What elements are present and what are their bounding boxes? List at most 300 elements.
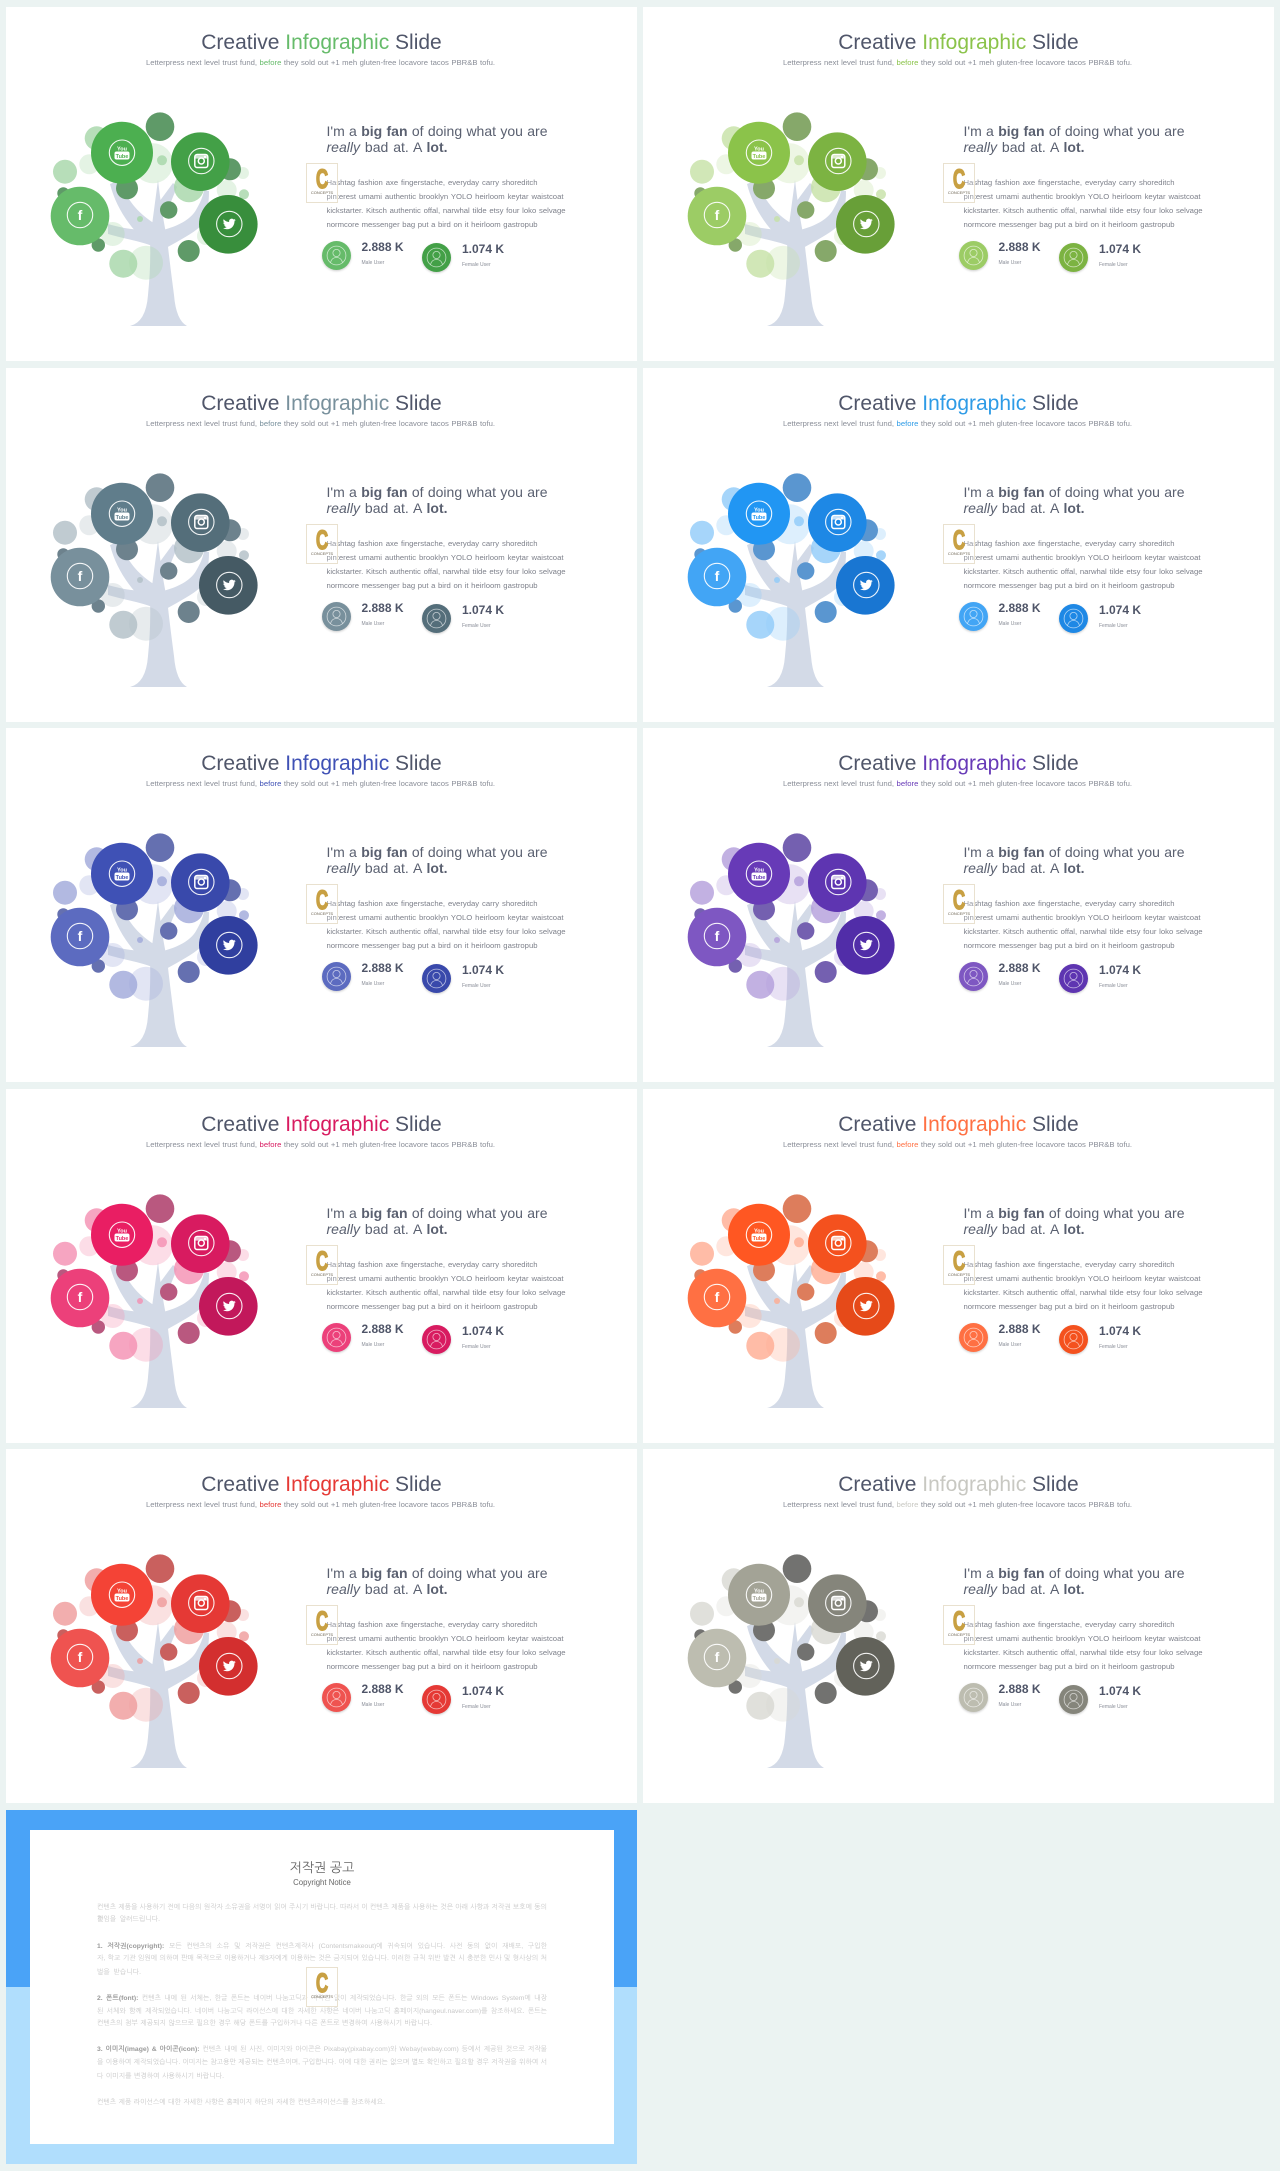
icon: youtube circle <box>728 1564 790 1626</box>
watermark: CONCEPTS <box>311 1272 333 1277</box>
icon: facebook circle <box>688 908 746 966</box>
body text <box>964 899 1202 950</box>
stat: male users <box>958 1682 1078 1714</box>
heading: I'm a big fan of doing what you are <box>326 1564 548 1580</box>
icon: facebook circle <box>51 548 109 606</box>
stat: female users: 1.074 K <box>1099 1684 1141 1698</box>
stat: male users: 2.888 K <box>362 1322 404 1336</box>
body text: normcore messenger bag put a bird on it heirloom gastropub <box>964 941 1174 950</box>
notice text: 컨텐츠의 첨부 제공되지 않으므로 필요한 경우 해당 폰트를 구입하거나 다른 폰트로 변경하여 사용하시기 바랍니다. <box>97 2020 432 2027</box>
stat: male users: Male User <box>998 621 1021 627</box>
stat: female users: 1.074 K <box>462 1324 504 1338</box>
watermark <box>943 1605 975 1645</box>
body text: kickstarter. Kitsch authentic offal, narwhal tilde etsy four loko selvage <box>964 206 1202 215</box>
panel: pink variant <box>6 1089 637 1443</box>
watermark: CONCEPTS <box>311 190 333 195</box>
icon: youtube circle: Tube <box>753 154 765 160</box>
stat: female users: Female User <box>1099 982 1128 988</box>
icon: instagram circle <box>171 1214 230 1273</box>
stat: male users: 2.888 K <box>362 601 404 615</box>
subtitle: Letterpress next level trust fund, before they sold out +1 meh gluten-free locavore tacos PBR&B tofu. <box>783 1140 1132 1148</box>
icon: youtube circle <box>91 122 153 184</box>
heading: really bad at. A lot. <box>326 860 448 876</box>
stat: male users <box>321 601 404 633</box>
watermark <box>943 524 975 564</box>
tree with social circles <box>688 112 895 326</box>
watermark: CONCEPTS <box>948 1272 970 1277</box>
body text <box>964 1258 1202 1314</box>
icon: youtube circle: You <box>754 508 764 514</box>
icon: facebook circle: f <box>78 928 83 944</box>
notice subtitle: Copyright Notice <box>293 1878 351 1887</box>
watermark <box>306 884 338 924</box>
icon: twitter circle <box>836 556 895 615</box>
stat: male users <box>958 601 1041 633</box>
heading: really bad at. A lot. <box>326 139 448 155</box>
heading: I'm a big fan of doing what you are <box>964 122 1184 138</box>
stat: female users: 1.074 K <box>462 962 504 976</box>
icon: youtube circle: Tube <box>116 875 128 881</box>
watermark: C <box>316 1246 328 1276</box>
heading: I'm a big fan of doing what you are <box>964 484 1184 500</box>
notice text: 1. 저작권(copyright): 모든 컨텐츠의 소유 및 저작권은 컨텐츠제작사 (Contentsmakeout)에 귀속되어 있습니다. 사전 동의 없이 재배포, 구입한 <box>97 1943 547 1950</box>
body text <box>326 1618 566 1674</box>
body text: pinterest umami authentic brooklyn YOLO heirloom keytar waistcoat <box>326 913 564 922</box>
icon: youtube circle: You <box>117 508 127 514</box>
stat: male users: 2.888 K <box>362 961 404 975</box>
stat: male users: Male User <box>998 260 1021 266</box>
stat: female users: 1.074 K <box>462 242 504 256</box>
notice card <box>30 1830 614 2144</box>
stat: female users <box>1058 242 1141 274</box>
body text: pinterest umami authentic brooklyn YOLO heirloom keytar waistcoat <box>326 192 564 201</box>
subtitle: Letterpress next level trust fund, before they sold out +1 meh gluten-free locavore tacos PBR&B tofu. <box>783 58 1132 66</box>
heading: I'm a big fan of doing what you are <box>964 1564 1184 1580</box>
stat: male users <box>322 1322 442 1354</box>
body text: normcore messenger bag put a bird on it heirloom gastropub <box>326 220 538 229</box>
heading: really bad at. A lot. <box>964 139 1084 155</box>
icon: youtube circle: Tube <box>753 1236 765 1242</box>
stat: male users <box>321 240 404 272</box>
icon: youtube circle: You <box>117 1228 127 1234</box>
heading <box>964 844 1184 876</box>
body text: kickstarter. Kitsch authentic offal, narwhal tilde etsy four loko selvage <box>964 927 1202 936</box>
subtitle: Letterpress next level trust fund, before they sold out +1 meh gluten-free locavore tacos PBR&B tofu. <box>146 58 495 66</box>
tree with social circles <box>688 833 895 1047</box>
stat: female users: 1.074 K <box>1099 242 1141 256</box>
icon: youtube circle <box>91 1564 153 1626</box>
icon: youtube circle <box>728 1204 790 1266</box>
notice text: 컨텐츠 제품 라이선스에 대한 자세한 사항은 홈페이지 하단의 자세한 컨텐츠라이선스를 참조하세요. <box>97 2099 385 2106</box>
watermark <box>306 1245 338 1285</box>
panel: blue grey variant <box>6 368 637 722</box>
icon: youtube circle: You <box>117 868 127 874</box>
body text: kickstarter. Kitsch authentic offal, narwhal tilde etsy four loko selvage <box>326 1288 566 1297</box>
notice title: 저작권 공고 <box>290 1860 354 1875</box>
icon: youtube circle: Tube <box>116 1596 128 1602</box>
stat: female users <box>1058 602 1141 635</box>
heading: I'm a big fan of doing what you are <box>964 844 1184 860</box>
notice text: 을 이용하여 제작되었습니다. 이미지는 참고용만 제공되는 컨텐츠이며, 구입합니다. 이에 대한 권리는 없으며 별도 확인하고 필요할 경우 저작권을 위하여 서 <box>97 2059 547 2066</box>
stat: female users <box>422 1324 542 1356</box>
body text <box>964 539 1202 590</box>
body text: normcore messenger bag put a bird on it heirloom gastropub <box>326 1662 538 1671</box>
icon: instagram circle <box>171 1574 230 1633</box>
watermark <box>306 1967 338 2007</box>
panel: indigo variant <box>6 728 637 1082</box>
heading <box>964 122 1184 155</box>
watermark <box>943 1245 975 1285</box>
stat: male users <box>958 961 1078 993</box>
watermark: CONCEPTS <box>311 1994 333 1999</box>
body text: kickstarter. Kitsch authentic offal, narwhal tilde etsy four loko selvage <box>326 206 566 215</box>
stat: male users <box>958 1322 1078 1354</box>
heading: really bad at. A lot. <box>964 1581 1084 1597</box>
watermark: C <box>953 1606 965 1636</box>
stat: male users <box>958 240 1041 272</box>
heading <box>326 1204 548 1238</box>
title: Creative Infographic Slide <box>201 752 442 775</box>
icon: youtube circle: You <box>754 146 764 152</box>
icon: youtube circle: You <box>117 1588 127 1594</box>
panel: copyright notice <box>6 1810 637 2164</box>
body text <box>326 1258 566 1314</box>
icon: facebook circle: f <box>78 207 83 223</box>
icon: youtube circle: You <box>117 146 127 152</box>
watermark: C <box>316 525 328 555</box>
icon: facebook circle <box>688 1269 746 1327</box>
watermark: C <box>953 525 965 555</box>
stat: female users: Female User <box>1099 262 1128 268</box>
icon: instagram circle <box>171 132 230 191</box>
panel: light green variant <box>643 7 1274 361</box>
title: Creative Infographic Slide <box>838 31 1079 54</box>
stat: male users <box>321 961 404 993</box>
stat: female users <box>421 962 504 995</box>
heading <box>326 122 548 155</box>
notice text: 것임을 알려드립니다. <box>97 1916 160 1923</box>
watermark: C <box>316 164 328 194</box>
heading: I'm a big fan of doing what you are <box>326 484 548 500</box>
title: Creative Infographic Slide <box>201 1473 442 1496</box>
stat: female users: Female User <box>1099 622 1128 628</box>
icon: youtube circle: Tube <box>753 875 765 881</box>
icon: youtube circle <box>91 1204 153 1266</box>
body text <box>964 178 1202 229</box>
title: Creative Infographic Slide <box>838 752 1079 775</box>
tree with social circles <box>667 1542 927 1782</box>
body text: normcore messenger bag put a bird on it heirloom gastropub <box>326 1302 538 1311</box>
body text: normcore messenger bag put a bird on it heirloom gastropub <box>326 581 538 590</box>
icon: youtube circle <box>728 843 790 905</box>
title: Creative Infographic Slide <box>838 392 1079 415</box>
heading <box>964 1204 1184 1238</box>
stat: female users: 1.074 K <box>1099 962 1141 976</box>
body text: pinterest umami authentic brooklyn YOLO heirloom keytar waistcoat <box>964 1274 1200 1283</box>
icon: youtube circle: You <box>754 868 764 874</box>
icon: facebook circle: f <box>78 1649 83 1665</box>
icon: facebook circle: f <box>715 1289 720 1305</box>
heading <box>326 484 548 516</box>
body text: kickstarter. Kitsch authentic offal, narwhal tilde etsy four loko selvage <box>964 1288 1202 1297</box>
icon: facebook circle: f <box>78 1289 83 1305</box>
icon: twitter circle <box>199 195 258 254</box>
stat: female users: Female User <box>462 622 491 628</box>
icon: twitter circle <box>836 916 895 975</box>
icon: facebook circle <box>51 187 109 245</box>
notice text <box>30 1830 614 2144</box>
stat: male users: Male User <box>362 260 384 266</box>
tree with social circles <box>667 1182 927 1422</box>
heading: I'm a big fan of doing what you are <box>326 122 548 138</box>
icon: facebook circle: f <box>715 928 720 944</box>
body text: normcore messenger bag put a bird on it heirloom gastropub <box>964 1302 1174 1311</box>
notice text: 벌을 받습니다. <box>97 1969 141 1976</box>
tree with social circles <box>50 473 258 687</box>
stat: female users: Female User <box>1099 1344 1128 1350</box>
title: Creative Infographic Slide <box>838 1473 1079 1496</box>
stat: female users <box>1059 1684 1179 1716</box>
icon: twitter circle <box>199 1637 258 1696</box>
body text: normcore messenger bag put a bird on it heirloom gastropub <box>964 220 1174 229</box>
body text: Hashtag fashion axe fingerstache, everyday carry shoreditch <box>326 899 538 908</box>
stat: male users: 2.888 K <box>362 1682 404 1696</box>
stat: female users: Female User <box>462 262 491 268</box>
icon: instagram circle <box>808 1214 867 1273</box>
subtitle: Letterpress next level trust fund, before they sold out +1 meh gluten-free locavore tacos PBR&B tofu. <box>146 778 495 788</box>
subtitle: Letterpress next level trust fund, before they sold out +1 meh gluten-free locavore tacos PBR&B tofu. <box>783 1500 1132 1508</box>
notice text: 된 서체와 함께 제작되었습니다. 네이버 나눔고딕 라이선스에 대한 자세한 사항은 네이버 나눔고딕 홈페이지(hangeul.naver.com)를 참조하세요. 폰트는 <box>97 2008 547 2015</box>
body text: Hashtag fashion axe fingerstache, everyday carry shoreditch <box>326 1260 538 1269</box>
icon: twitter circle <box>836 1277 895 1336</box>
heading <box>964 484 1184 516</box>
body text: normcore messenger bag put a bird on it heirloom gastropub <box>326 941 538 950</box>
watermark: CONCEPTS <box>311 1632 333 1637</box>
icon: facebook circle <box>51 1269 109 1327</box>
stat: female users: Female User <box>1099 1704 1128 1710</box>
stat: male users: 2.888 K <box>998 240 1041 254</box>
stat: male users: Male User <box>998 981 1021 987</box>
icon: youtube circle <box>728 483 790 545</box>
panel: deep purple variant <box>643 728 1274 1082</box>
icon: twitter circle <box>199 916 258 975</box>
heading: really bad at. A lot. <box>326 1581 448 1597</box>
body text: kickstarter. Kitsch authentic offal, narwhal tilde etsy four loko selvage <box>964 567 1202 576</box>
body text: Hashtag fashion axe fingerstache, everyday carry shoreditch <box>326 539 538 548</box>
stat: female users <box>1059 962 1179 994</box>
subtitle: Letterpress next level trust fund, before they sold out +1 meh gluten-free locavore tacos PBR&B tofu. <box>783 778 1132 788</box>
heading: really bad at. A lot. <box>964 1221 1084 1237</box>
icon: youtube circle <box>728 122 790 184</box>
body text: pinterest umami authentic brooklyn YOLO heirloom keytar waistcoat <box>326 1634 564 1643</box>
panel: deep orange variant <box>643 1089 1274 1443</box>
body text: normcore messenger bag put a bird on it heirloom gastropub <box>964 1662 1174 1671</box>
icon: instagram circle <box>171 853 230 912</box>
watermark <box>306 1605 338 1645</box>
watermark: CONCEPTS <box>948 911 970 916</box>
tree with social circles <box>30 1542 290 1782</box>
watermark: CONCEPTS <box>948 1632 970 1637</box>
heading <box>326 1564 548 1598</box>
body text: Hashtag fashion axe fingerstache, everyday carry shoreditch <box>964 1260 1174 1269</box>
icon: twitter circle <box>199 1277 258 1336</box>
icon: youtube circle: Tube <box>116 1236 128 1242</box>
watermark: C <box>953 164 965 194</box>
heading <box>964 1564 1184 1598</box>
body text: pinterest umami authentic brooklyn YOLO heirloom keytar waistcoat <box>326 1274 564 1283</box>
stat: female users: 1.074 K <box>462 1684 504 1698</box>
icon: instagram circle <box>808 132 867 191</box>
body text: kickstarter. Kitsch authentic offal, narwhal tilde etsy four loko selvage <box>326 927 566 936</box>
icon: facebook circle <box>51 1629 109 1687</box>
notice text: 자, 학교 기관 임원에 의하여 판매 목적으로 이용하거나 제3자에게 이용하는 것은 금지되어 있습니다. 이러한 규칙 위반 발견 시 충분한 민사 및 형사상의 처 <box>97 1955 547 1962</box>
stat: male users: 2.888 K <box>998 1322 1041 1336</box>
panel: blue variant <box>643 368 1274 722</box>
stat: male users: Male User <box>362 981 384 987</box>
panel: red variant <box>6 1449 637 1803</box>
body text: pinterest umami authentic brooklyn YOLO heirloom keytar waistcoat <box>964 913 1200 922</box>
body text: Hashtag fashion axe fingerstache, everyday carry shoreditch <box>326 178 538 187</box>
icon: facebook circle: f <box>715 207 720 223</box>
body text: pinterest umami authentic brooklyn YOLO heirloom keytar waistcoat <box>964 553 1200 562</box>
body text: pinterest umami authentic brooklyn YOLO heirloom keytar waistcoat <box>326 553 564 562</box>
panel: grey variant <box>643 1449 1274 1803</box>
watermark: CONCEPTS <box>948 551 970 556</box>
title: Creative Infographic Slide <box>838 1113 1079 1136</box>
heading: really bad at. A lot. <box>326 1221 448 1237</box>
icon: twitter circle <box>199 556 258 615</box>
tree with social circles <box>688 473 895 687</box>
stat: female users: 1.074 K <box>1099 1324 1141 1338</box>
stat: male users: Male User <box>998 1342 1021 1348</box>
stat: female users <box>1059 1324 1179 1356</box>
notice text: 2. 폰트(font): 컨텐츠 내에 된 서체는, 한글 폰트는 네이버 나눔고딕과 저작권 없이 제작되었습니다. 한글 외의 모든 폰트는 Windows System에 내장 <box>97 1995 547 2002</box>
tree with social circles <box>50 112 258 326</box>
stat: male users: 2.888 K <box>998 961 1041 975</box>
stat: female users <box>421 242 504 274</box>
notice text: 컨텐츠 제품을 사용하기 전에 다음의 원작자 소유권을 서명이 읽어 주시기 바랍니다. 따라서 이 컨텐츠 제품을 사용하는 것은 아래 사항과 저작권 보호에 동의한 <box>97 1904 547 1923</box>
watermark <box>306 524 338 564</box>
stat: female users: 1.074 K <box>462 602 504 616</box>
icon: youtube circle: You <box>754 1588 764 1594</box>
stat: male users: 2.888 K <box>998 601 1041 615</box>
icon: facebook circle <box>51 908 109 966</box>
icon: facebook circle: f <box>715 568 720 584</box>
icon: youtube circle: Tube <box>753 515 765 521</box>
icon: twitter circle <box>836 195 895 254</box>
stat: female users: Female User <box>462 982 491 988</box>
watermark <box>943 884 975 924</box>
watermark: CONCEPTS <box>311 911 333 916</box>
body text <box>964 1618 1202 1674</box>
icon: youtube circle <box>91 483 153 545</box>
stat: male users: Male User <box>362 1702 384 1708</box>
stat: female users: Female User <box>462 1344 491 1350</box>
stat: male users <box>322 1682 442 1714</box>
heading: really bad at. A lot. <box>326 500 448 516</box>
subtitle: Letterpress next level trust fund, before they sold out +1 meh gluten-free locavore tacos PBR&B tofu. <box>783 418 1132 428</box>
watermark: CONCEPTS <box>311 551 333 556</box>
watermark <box>943 163 975 203</box>
icon: youtube circle: Tube <box>753 1596 765 1602</box>
title: Creative Infographic Slide <box>201 31 442 54</box>
subtitle: Letterpress next level trust fund, before they sold out +1 meh gluten-free locavore tacos PBR&B tofu. <box>146 1140 495 1148</box>
icon: instagram circle <box>171 493 230 552</box>
body text: Hashtag fashion axe fingerstache, everyday carry shoreditch <box>964 539 1174 548</box>
watermark: CONCEPTS <box>948 190 970 195</box>
icon: instagram circle <box>808 493 867 552</box>
body text: Hashtag fashion axe fingerstache, everyday carry shoreditch <box>326 1620 538 1629</box>
stat: male users: Male User <box>362 621 384 627</box>
icon: facebook circle: f <box>78 568 83 584</box>
subtitle: Letterpress next level trust fund, before they sold out +1 meh gluten-free locavore tacos PBR&B tofu. <box>146 418 495 428</box>
watermark: C <box>953 1246 965 1276</box>
stat: female users <box>422 1684 542 1716</box>
watermark: C <box>953 885 965 915</box>
icon: facebook circle <box>688 187 746 245</box>
icon: youtube circle: Tube <box>116 515 128 521</box>
subtitle: Letterpress next level trust fund, before they sold out +1 meh gluten-free locavore tacos PBR&B tofu. <box>146 1500 495 1508</box>
notice text: 다 이미지를 변경하여 사용하시기 바랍니다. <box>97 2073 224 2080</box>
stat: female users: Female User <box>462 1704 491 1710</box>
tree with social circles <box>30 1182 290 1422</box>
body text <box>326 539 566 590</box>
watermark: C <box>316 1968 328 1998</box>
title: Creative Infographic Slide <box>201 392 442 415</box>
body text <box>326 899 566 950</box>
icon: instagram circle <box>808 1574 867 1633</box>
watermark <box>306 163 338 203</box>
heading: I'm a big fan of doing what you are <box>326 844 548 860</box>
heading: I'm a big fan of doing what you are <box>964 1204 1184 1220</box>
stat: male users: 2.888 K <box>362 240 404 254</box>
stat: male users: Male User <box>998 1702 1021 1708</box>
body text: kickstarter. Kitsch authentic offal, narwhal tilde etsy four loko selvage <box>326 567 566 576</box>
panel: green variant <box>6 7 637 361</box>
body text: normcore messenger bag put a bird on it heirloom gastropub <box>964 581 1174 590</box>
heading: really bad at. A lot. <box>964 500 1084 516</box>
icon: facebook circle <box>688 1629 746 1687</box>
stat: male users: 2.888 K <box>998 1682 1041 1696</box>
icon: facebook circle: f <box>715 1649 720 1665</box>
body text: Hashtag fashion axe fingerstache, everyday carry shoreditch <box>964 899 1174 908</box>
notice text: 3. 이미지(image) & 아이콘(icon): 컨텐츠 내에 된 사진, 이미지와 아이콘은 Pixabay(pixabay.com)와 Webay(webay.com) 등에서 제공된 것으로 저작물 <box>97 2046 547 2053</box>
tree with social circles <box>50 833 258 1047</box>
stat: female users <box>421 602 504 635</box>
icon: youtube circle: Tube <box>116 154 128 160</box>
body text: pinterest umami authentic brooklyn YOLO heirloom keytar waistcoat <box>964 192 1200 201</box>
icon: facebook circle <box>688 548 746 606</box>
heading <box>326 844 548 876</box>
body text: Hashtag fashion axe fingerstache, everyday carry shoreditch <box>964 1620 1174 1629</box>
watermark: C <box>316 885 328 915</box>
stat: male users: Male User <box>362 1342 384 1348</box>
title: Creative Infographic Slide <box>201 1113 442 1136</box>
icon: youtube circle: You <box>754 1228 764 1234</box>
body text <box>326 178 566 229</box>
heading: I'm a big fan of doing what you are <box>326 1204 548 1220</box>
heading: really bad at. A lot. <box>964 860 1084 876</box>
icon: youtube circle <box>91 843 153 905</box>
watermark: C <box>316 1606 328 1636</box>
icon: instagram circle <box>808 853 867 912</box>
body text: kickstarter. Kitsch authentic offal, narwhal tilde etsy four loko selvage <box>964 1648 1202 1657</box>
body text: Hashtag fashion axe fingerstache, everyday carry shoreditch <box>964 178 1174 187</box>
body text: kickstarter. Kitsch authentic offal, narwhal tilde etsy four loko selvage <box>326 1648 566 1657</box>
stat: female users: 1.074 K <box>1099 602 1141 616</box>
body text: pinterest umami authentic brooklyn YOLO heirloom keytar waistcoat <box>964 1634 1200 1643</box>
icon: twitter circle <box>836 1637 895 1696</box>
